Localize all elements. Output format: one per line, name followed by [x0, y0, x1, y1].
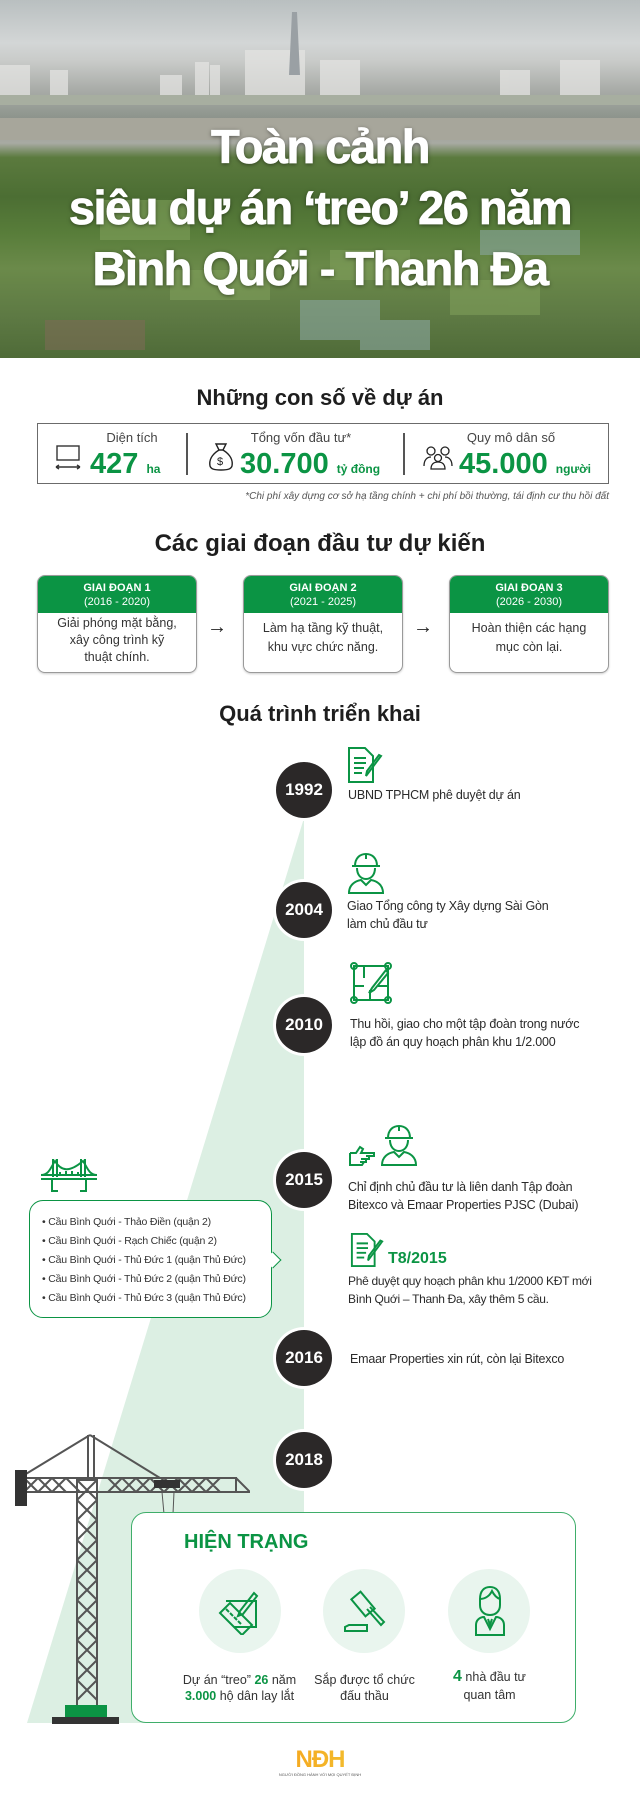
- event: 1992: 1992: [285, 780, 323, 799]
- item: hanging: 3.000 hộ dân lay lắt: [185, 1689, 294, 1703]
- phase 1: Giải phóng mặt bằng,: [57, 616, 177, 630]
- event: 2010: Thu hồi, giao cho một tập đoàn trong nước: [350, 1017, 579, 1031]
- icon: area: [56, 445, 80, 470]
- title: Bình Quới - Thanh Đa: [92, 242, 548, 295]
- phase 3: [449, 575, 609, 673]
- stat: capital: [209, 430, 380, 480]
- phase 3: GIAI ĐOẠN 3: [495, 582, 563, 594]
- event: 2015: Chỉ định chủ đầu tư là liên danh Tập đoàn: [348, 1180, 572, 1194]
- icon: pointing hand: [349, 1146, 375, 1166]
- event: 2015: [273, 1125, 578, 1212]
- icon: ruler pencil: [218, 1592, 258, 1635]
- icon: worker: [381, 1125, 417, 1166]
- event: 2018: [276, 1432, 332, 1488]
- event: 2010: 2010: [285, 1015, 323, 1034]
- item: auction: đấu thầu: [340, 1689, 389, 1703]
- callout: bridge list: • Cầu Bình Quới - Rạch Chiếc (quận 2): [42, 1235, 217, 1247]
- stat: population: 45.000 người: [459, 448, 591, 480]
- phase 1: (2016 - 2020): [84, 596, 150, 608]
- event: 2010: lập đồ án quy hoạch phân khu 1/2.000: [350, 1035, 555, 1049]
- icon: gavel: [344, 1590, 386, 1632]
- event: 2004: Giao Tổng công ty Xây dựng Sài Gòn: [347, 899, 548, 913]
- item: investors: 4 nhà đầu tư: [453, 1668, 526, 1685]
- event: 2015: Bitexco và Emaar Properties PJSC (Dubai): [348, 1198, 578, 1212]
- phase 1: [37, 575, 197, 673]
- divider: [186, 433, 188, 475]
- phase 2: [243, 575, 403, 673]
- item: hanging: Dự án “treo” 26 năm: [183, 1673, 296, 1687]
- icon: businessman: [475, 1586, 505, 1636]
- logo: NDH: NGƯỜI ĐỒNG HÀNH VỚI MỌI QUYẾT ĐỊNH: [279, 1772, 361, 1777]
- hero photo background: [0, 0, 640, 358]
- item: investors: quan tâm: [463, 1688, 516, 1702]
- stat: capital: 30.700 tỷ đồng: [240, 448, 380, 480]
- phase 2: (2021 - 2025): [290, 596, 356, 608]
- event: 2004: [274, 853, 548, 941]
- event: 1992: UBND TPHCM phê duyệt dự án: [348, 788, 520, 802]
- stats panel: [37, 423, 609, 484]
- heading: status: HIỆN TRẠNG: [184, 1531, 308, 1553]
- item: auction: [314, 1569, 415, 1703]
- icon: people: [423, 446, 453, 470]
- event: T8/2015: [348, 1233, 592, 1306]
- icon: document: [348, 747, 382, 783]
- crane: [15, 1434, 250, 1724]
- callout: bridge list: • Cầu Bình Quới - Thảo Điền (quận 2): [42, 1216, 211, 1228]
- icon: worker: [348, 853, 384, 894]
- logo: NDH: [279, 1746, 361, 1777]
- arrow: →: [413, 616, 433, 638]
- callout: bridge list: [29, 1200, 272, 1318]
- item: auction: Sắp được tổ chức: [314, 1673, 415, 1687]
- event: 2004: 2004: [285, 900, 323, 919]
- event: 2016: 2016: [285, 1348, 323, 1367]
- heading: phases: Các giai đoạn đầu tư dự kiến: [155, 530, 485, 557]
- phase 1: GIAI ĐOẠN 1: [83, 582, 151, 594]
- event: 2010: [273, 962, 580, 1056]
- event: T8/2015: Phê duyệt quy hoạch phân khu 1/2000 KĐT mới: [348, 1274, 592, 1288]
- callout: bridge list: • Cầu Bình Quới - Thủ Đức 2 (quận Thủ Đức): [42, 1273, 246, 1285]
- phase 2: GIAI ĐOẠN 2: [289, 582, 357, 594]
- footnote: *Chi phí xây dựng cơ sở hạ tầng chính + chi phí bồi thường, tái định cư thu hồi đất: [245, 491, 609, 502]
- event: 2016: Emaar Properties xin rút, còn lại Bitexco: [350, 1352, 564, 1366]
- event: T8/2015: Bình Quới – Thanh Đa, xây thêm 5 cầu.: [348, 1292, 549, 1306]
- event: 2015: 2015: [285, 1170, 323, 1189]
- phase 2: khu vực chức năng.: [268, 640, 378, 654]
- event: 2018: 2018: [285, 1450, 323, 1469]
- heading: numbers: Những con số về dự án: [196, 385, 444, 410]
- phase 3: mục còn lại.: [496, 640, 562, 654]
- phase 1: xây công trình kỹ: [70, 633, 164, 647]
- heading: timeline: Quá trình triển khai: [219, 701, 421, 726]
- icon: money bag: [209, 443, 233, 471]
- stat: population: [423, 430, 591, 480]
- stat: capital: Tổng vốn đầu tư*: [251, 430, 351, 445]
- event: 2004: làm chủ đầu tư: [347, 917, 428, 931]
- callout: bridge list: • Cầu Bình Quới - Thủ Đức 1 (quận Thủ Đức): [42, 1254, 246, 1266]
- bridge icon: [41, 1159, 97, 1192]
- icon: plan with pencil: [350, 962, 392, 1004]
- stat: area: [56, 430, 160, 480]
- stat: area: 427 ha: [90, 448, 160, 480]
- item: hanging: [183, 1569, 296, 1703]
- event: 2016: [273, 1327, 564, 1389]
- stat: area: Diện tích: [106, 430, 158, 445]
- icon: money bag: $: [217, 456, 223, 468]
- stat: population: Quy mô dân số: [467, 430, 555, 445]
- event: T8/2015: T8/2015: [388, 1250, 447, 1267]
- phase 2: Làm hạ tầng kỹ thuật,: [263, 621, 383, 635]
- icon: document: [350, 1233, 384, 1267]
- phase 3: (2026 - 2030): [496, 596, 562, 608]
- item: investors: [448, 1569, 530, 1702]
- event: 1992: [276, 747, 520, 821]
- panel: current status: [131, 1512, 576, 1723]
- title: Toàn cảnh: [211, 120, 429, 173]
- logo: NDH: NĐH: [296, 1746, 344, 1773]
- title: [69, 120, 572, 298]
- arrow: →: [207, 616, 227, 638]
- phase 3: Hoàn thiện các hạng: [472, 621, 586, 635]
- phase 1: thuật chính.: [84, 650, 150, 664]
- title: siêu dự án ‘treo’ 26 năm: [69, 181, 571, 234]
- callout: bridge list: • Cầu Bình Quới - Thủ Đức 3 (quận Thủ Đức): [42, 1292, 246, 1304]
